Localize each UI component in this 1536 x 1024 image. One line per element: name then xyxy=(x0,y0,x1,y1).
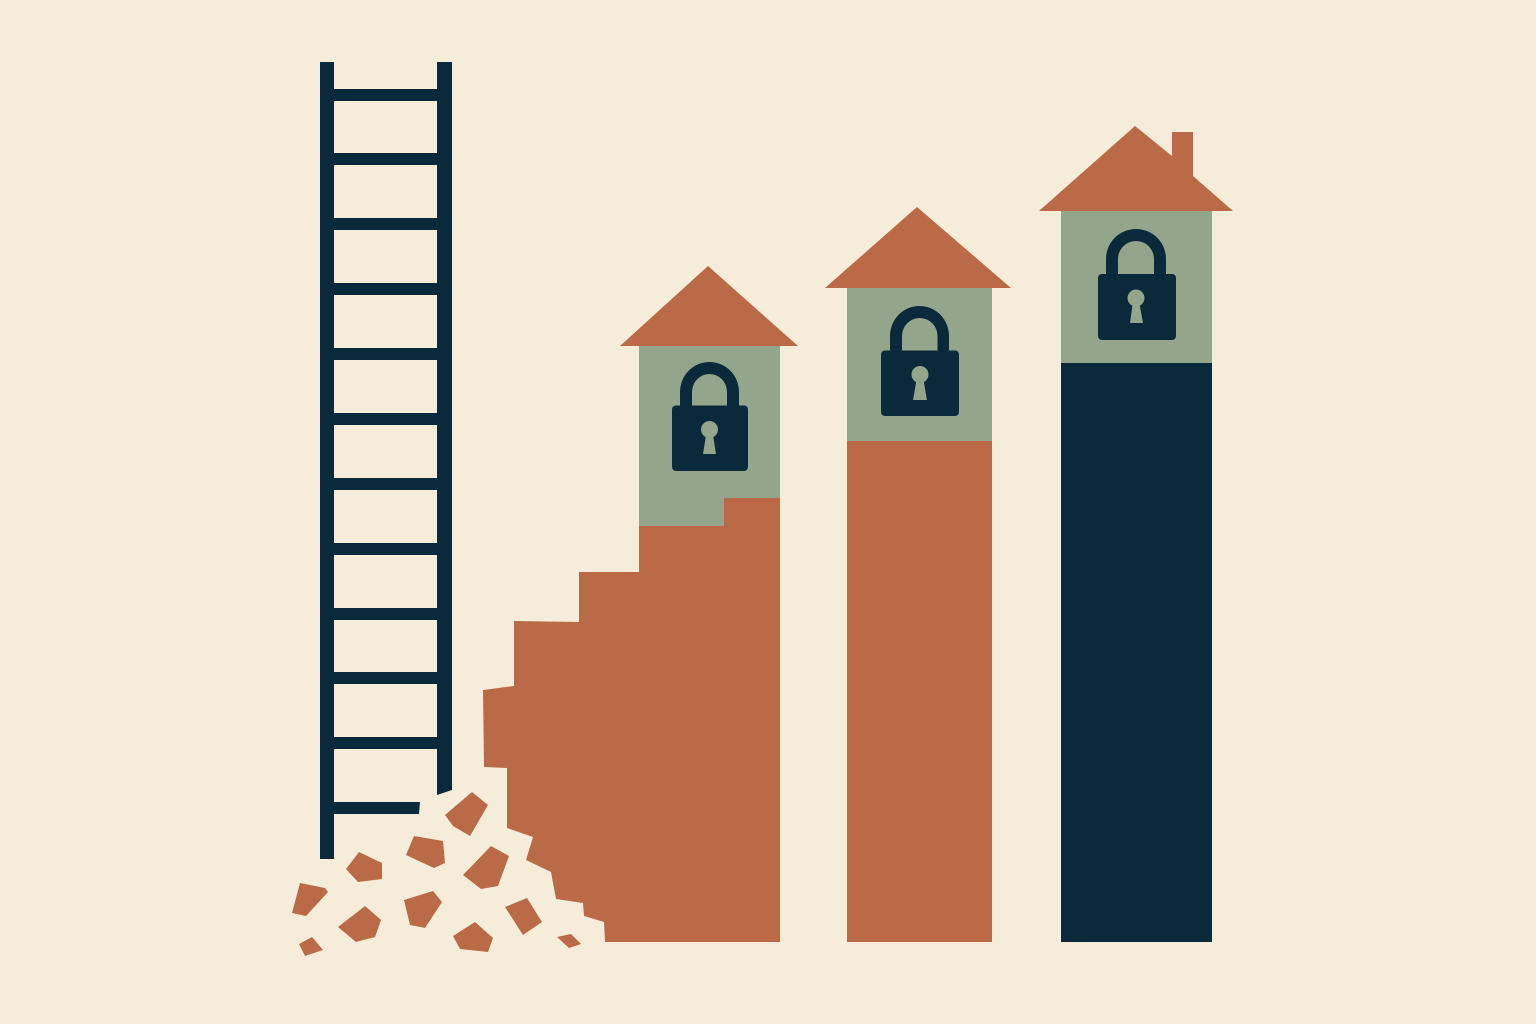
tower 2 padlock xyxy=(881,306,959,416)
tower 3 wall xyxy=(1061,211,1212,364)
tower 3 padlock xyxy=(1098,229,1176,340)
tower 1 roof xyxy=(620,266,798,346)
tower 1: crumbling orange xyxy=(483,266,798,942)
tower 1 padlock xyxy=(672,362,748,471)
tower 3: navy xyxy=(1039,126,1233,942)
tower 1 wall xyxy=(639,346,780,528)
tower 1 crumbling bar xyxy=(483,498,780,942)
ladder with broken bottom xyxy=(320,62,452,859)
rubble pile xyxy=(292,792,581,956)
tower 3 roof with chimney xyxy=(1039,126,1233,211)
tower 2: orange xyxy=(825,207,1011,942)
tower 2 roof xyxy=(825,207,1011,288)
tower 2 wall xyxy=(847,288,992,442)
tower 3 bar xyxy=(1061,363,1212,942)
tower 2 bar xyxy=(847,441,992,942)
